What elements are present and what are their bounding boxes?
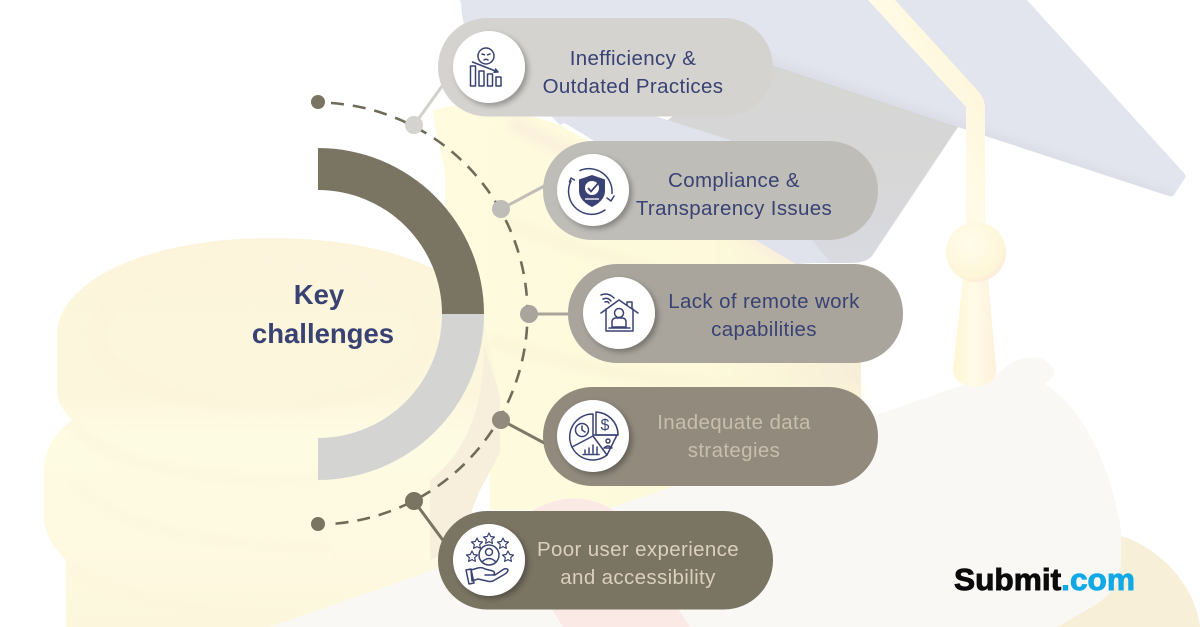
icon: house with remote worker (583, 277, 655, 349)
connector 5 (405, 492, 445, 543)
key challenges ring (318, 148, 484, 480)
arc end dot (311, 517, 325, 531)
title: Key (294, 279, 345, 310)
connector 1 (405, 82, 445, 134)
connector 3 (520, 305, 572, 323)
text: capabilities: capabilities (711, 318, 817, 341)
text: inadequate data: Inadequate data (657, 411, 811, 434)
connector 4 (492, 411, 548, 445)
icon: tassel (953, 278, 996, 387)
icon: shield with check and cycle arrows (557, 154, 629, 226)
background: left coin stack (40, 230, 510, 627)
icon: sad face with declining bars (453, 31, 525, 103)
text: outdated practices: Outdated Practices (543, 75, 723, 98)
text: strategies: strategies (688, 439, 780, 462)
panel: compliance and transparency issues (543, 141, 878, 240)
panel: inefficiency and outdated practices (438, 18, 773, 116)
text: transparency issues: Transparency Issues (636, 197, 832, 220)
background: middle coin stack (433, 100, 861, 510)
icon: cap strap (868, 0, 985, 228)
background: graduation cap (460, 0, 1186, 387)
ring: dark upper arc (318, 148, 484, 314)
arc start dot (311, 95, 325, 109)
logo: submit.com: Submit.com (954, 562, 1135, 597)
text: inefficiency: Inefficiency & (570, 47, 696, 70)
panel: inadequate data strategies (543, 387, 878, 486)
text: and accessibility: and accessibility (560, 566, 716, 589)
text: poor user experience: Poor user experience (537, 538, 739, 561)
icon: data pie chart (557, 400, 629, 472)
panel: lack of remote work capabilities (568, 264, 903, 363)
text: lack of remote work: Lack of remote work (668, 290, 860, 313)
dashed timeline arc (331, 103, 527, 524)
background: diploma scroll (270, 357, 1121, 627)
ring: light lower arc (318, 314, 484, 480)
background: right coin (1050, 536, 1200, 627)
connector 2 (492, 184, 548, 218)
text: compliance: Compliance & (668, 169, 800, 192)
icon: tassel knob (946, 222, 1006, 282)
icon: data pie chart: $ (601, 417, 610, 434)
panel: poor user experience and accessibility (438, 511, 773, 610)
background: diploma ribbon (438, 498, 690, 627)
icon: hand holding user with stars (453, 524, 525, 596)
title line 2: challenges (252, 318, 394, 349)
